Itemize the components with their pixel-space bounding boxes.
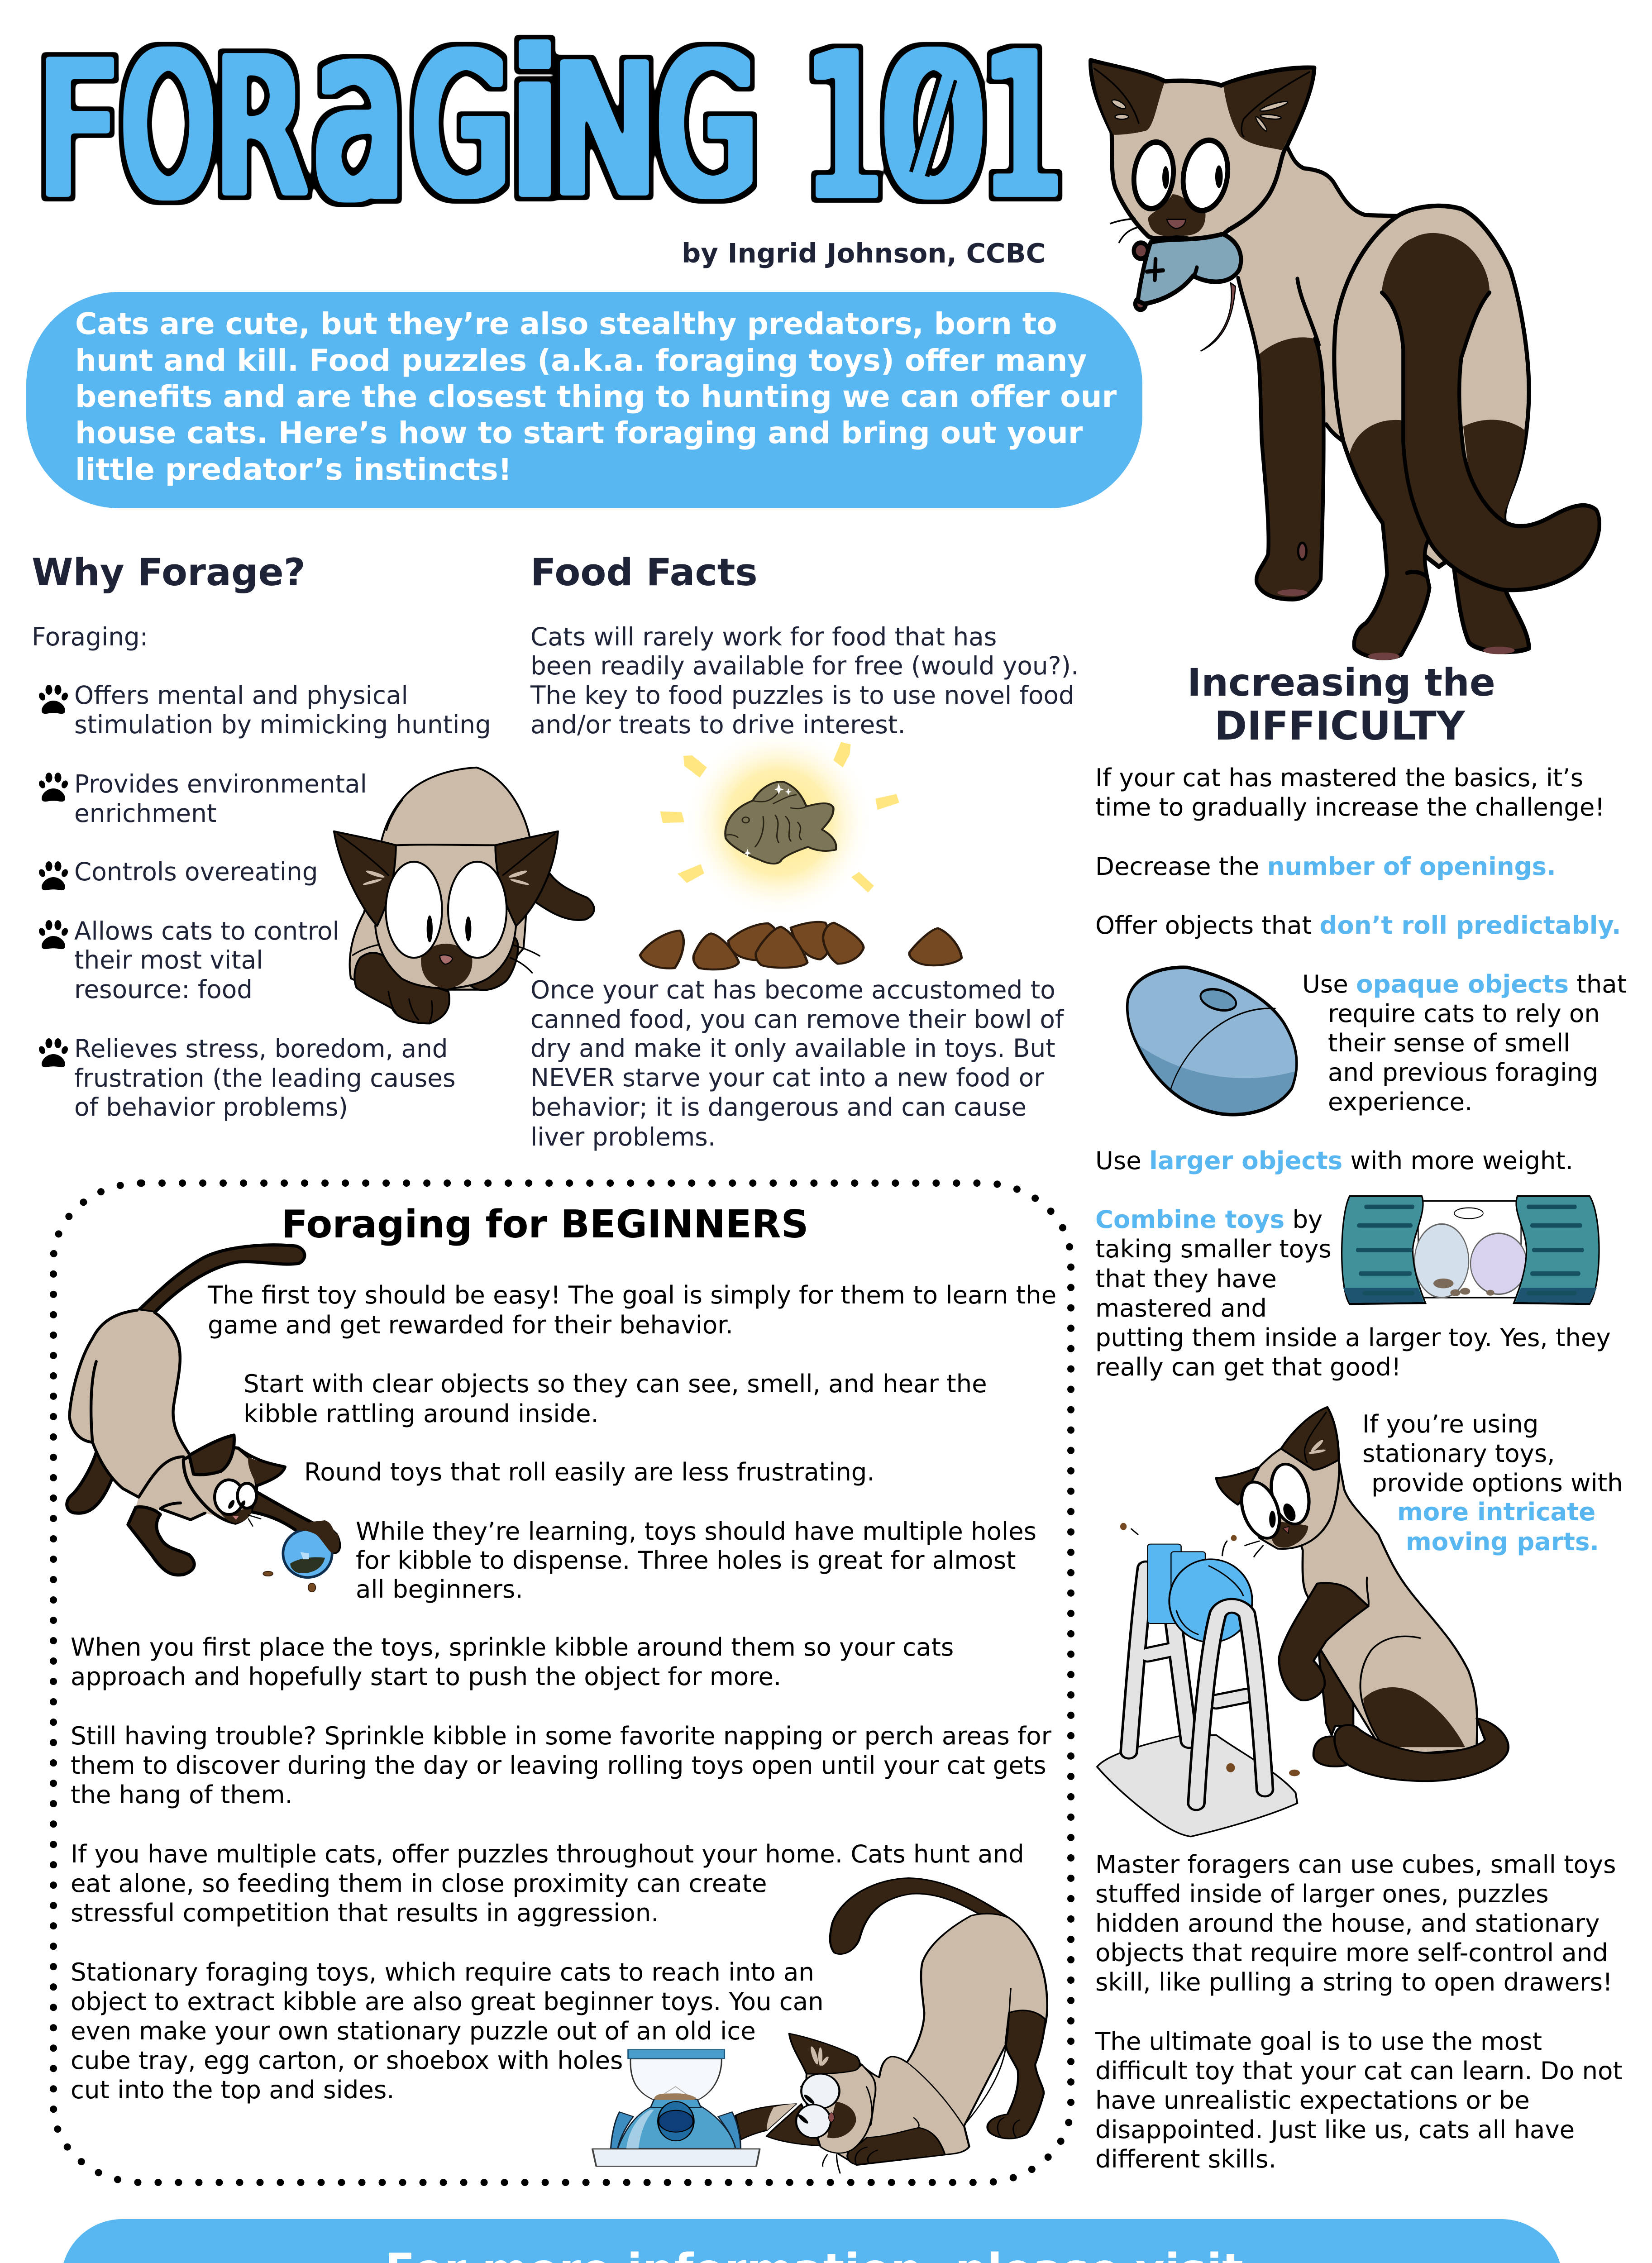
text: multiple holes: While they’re learning, toys should have multiple holes (356, 1517, 1036, 1546)
illustration: cat batting ball toy (67, 1245, 339, 1592)
title: 1 (807, 13, 883, 241)
text: larger objects: Use larger objects with more weight. (1095, 1146, 1573, 1175)
text: opaque objects: and previous foraging (1328, 1058, 1598, 1087)
icon: opaque blue toy (1127, 967, 1297, 1115)
text: food facts first paragraph: and/or treats to drive interest. (530, 710, 906, 739)
illustration: standing cat with toy mouse (1091, 60, 1599, 660)
list: foraging benefits (38, 681, 491, 1122)
text: multiple holes: all beginners. (356, 1575, 523, 1604)
text: stationary toys: cut into the top and sides. (71, 2075, 395, 2104)
text: combine toys: that they have (1095, 1264, 1277, 1293)
intro text: benefits and are the closest thing to hunting we can offer our (75, 379, 1117, 414)
text: sprinkle kibble: When you first place the toys, sprinkle kibble around them so your cats (71, 1633, 954, 1661)
text: opaque objects: their sense of smell (1328, 1028, 1570, 1057)
text: foraging intro: Foraging: (32, 622, 148, 651)
icon: paw (38, 685, 69, 714)
intro text: Cats are cute, but they’re also stealthy predators, born to (75, 306, 1057, 341)
text: opaque objects: experience. (1328, 1087, 1472, 1116)
text: combine toys: Combine toys by (1095, 1205, 1323, 1234)
text: multiple holes: for kibble to dispense. Three holes is great for almost (356, 1546, 1016, 1575)
icon: kibble pile (640, 922, 961, 969)
title: F (38, 24, 116, 237)
text: stationary toys: cube tray, egg carton, or shoebox with holes (71, 2046, 623, 2075)
icon: paw (38, 920, 69, 949)
text: opaque objects: require cats to rely on (1328, 999, 1600, 1028)
text: stationary toys: Stationary foraging toys, which require cats to reach into an (71, 1957, 814, 1986)
heading: increasing the difficulty: Increasing the (1187, 660, 1495, 705)
title (38, 0, 1064, 252)
byline: by Ingrid Johnson, CCBC (682, 238, 1046, 269)
text: food facts second paragraph: canned food, you can remove their bowl of (530, 1005, 1065, 1034)
title: O (123, 14, 214, 240)
text: food facts first paragraph: Cats will rarely work for food that has (530, 622, 997, 651)
bullet: stress: of behavior problems) (74, 1093, 348, 1122)
text: food facts second paragraph: dry and make it only available in toys. But (530, 1034, 1055, 1063)
text: combine toys: really can get that good! (1095, 1352, 1401, 1381)
panel: foraging for beginners (53, 1183, 1071, 2182)
text: stationary toys tip: stationary toys, (1362, 1439, 1555, 1468)
text: food facts first paragraph: The key to food puzzles is to use novel food (530, 681, 1074, 710)
text: opaque objects: Use opaque objects that (1302, 969, 1627, 998)
text: ultimate goal: different skills. (1095, 2144, 1276, 2173)
text: master foragers: skill, like pulling a string to open drawers! (1095, 1967, 1613, 1996)
text: ultimate goal: have unrealistic expectations or be (1095, 2086, 1530, 2115)
text: food facts second paragraph: liver problems. (530, 1122, 716, 1151)
intro text: hunt and kill. Food puzzles (a.k.a. foraging toys) offer many (75, 343, 1087, 378)
heading: Food Facts: Food Facts (530, 550, 758, 594)
title: G (658, 15, 757, 239)
icon: paw (38, 773, 69, 802)
title: 0 (879, 15, 988, 239)
title: N (552, 28, 657, 234)
bullet: enrichment: Provides environmental (74, 769, 367, 798)
bullet: stress: frustration (the leading causes (74, 1064, 456, 1093)
text: still having trouble: Still having trouble? Sprinkle kibble in some favorite napping or perch areas for (71, 1721, 1052, 1750)
text: combine toys: mastered and (1095, 1294, 1267, 1322)
text: sprinkle kibble: approach and hopefully start to push the object for more. (71, 1662, 781, 1691)
icon: glowing fish treat (660, 727, 899, 917)
text: master foragers: Master foragers can use cubes, small toys (1095, 1850, 1616, 1879)
illustration: crouching cat (334, 768, 594, 1023)
heading: beginners: Foraging for BEGINNERS (282, 1202, 808, 1246)
text: multiple cats: If you have multiple cats, offer puzzles throughout your home. Cats hunt and (71, 1839, 1024, 1868)
text: food facts first paragraph: been readily available for free (would you?). (530, 651, 1079, 680)
bullet: stress: Relieves stress, boredom, and (74, 1034, 448, 1063)
text: food facts second paragraph: NEVER starve your cat into a new food or (530, 1063, 1044, 1092)
text: stationary toys: even make your own stationary puzzle out of an old ice (71, 2016, 756, 2045)
text: multiple cats: eat alone, so feeding them in close proximity can create (71, 1869, 767, 1898)
title: R (215, 20, 306, 236)
heading: Why Forage: Why Forage? (32, 550, 306, 594)
text: right intro: If your cat has mastered the basics, it’s (1095, 763, 1583, 792)
bullet: control: Allows cats to control (74, 917, 339, 945)
intro panel (26, 292, 1142, 508)
text: clear objects: Start with clear objects so they can see, smell, and hear the (244, 1369, 987, 1398)
text: multiple cats: stressful competition that results in aggression. (71, 1898, 659, 1927)
icon: tube toy with balls inside (1342, 1196, 1599, 1304)
bullet: enrichment: enrichment (74, 799, 216, 828)
icon: paw (38, 1038, 69, 1067)
text: round toys: Round toys that roll easily are less frustrating. (304, 1457, 875, 1486)
bullet: mental stimulation: stimulation by mimicking hunting (74, 710, 491, 739)
footer banner (61, 2219, 1562, 2263)
title: i (503, 10, 566, 240)
text: ultimate goal: difficult toy that your cat can learn. Do not (1095, 2056, 1623, 2085)
text: stationary toys tip: moving parts. (1406, 1527, 1599, 1556)
text: still having trouble: them to discover during the day or leaving rolling toys open until your cat gets (71, 1751, 1046, 1780)
text: master foragers: stuffed inside of larger ones, puzzles (1095, 1879, 1549, 1908)
text: ultimate goal: disappointed. Just like us, cats all have (1095, 2115, 1575, 2144)
text: master foragers: hidden around the house, and stationary (1095, 1909, 1599, 1938)
text: food facts second paragraph: behavior; it is dangerous and can cause (530, 1093, 1027, 1122)
text: ultimate goal: The ultimate goal is to use the most (1095, 2027, 1542, 2056)
heading: increasing the difficulty (1187, 660, 1495, 749)
intro text: little predator’s instincts! (75, 452, 512, 487)
text: stationary toys tip: provide options with (1371, 1468, 1623, 1497)
icon: paw (38, 861, 69, 890)
text: food facts second paragraph: Once your cat has become accustomed to (530, 975, 1055, 1004)
illustration: cat with feeder toy (592, 1878, 1047, 2173)
text: stationary toys tip: more intricate (1397, 1497, 1595, 1526)
text: combine toys: taking smaller toys (1095, 1234, 1332, 1263)
bullet: mental stimulation: Offers mental and physical (74, 681, 408, 710)
bullet: control: resource: food (74, 975, 253, 1004)
text: still having trouble: the hang of them. (71, 1780, 293, 1809)
title: 1 (984, 13, 1064, 239)
title: G (413, 14, 510, 239)
text: right intro: time to gradually increase the challenge! (1095, 793, 1604, 821)
illustration: sitting cat with tower toy (1097, 1407, 1509, 1837)
heading: increasing the difficulty: DIFFICULTY (1214, 703, 1466, 749)
text: number of openings: Decrease the number of openings. (1095, 852, 1556, 881)
text: stationary toys: object to extract kibble are also great beginner toys. You can (71, 1987, 824, 2016)
bullet: control: their most vital (74, 945, 263, 974)
bullet: overeating: Controls overeating (74, 857, 318, 886)
text: first toy: game and get rewarded for their behavior. (208, 1310, 733, 1339)
text: master foragers: objects that require more self-control and (1095, 1938, 1608, 1967)
intro text: house cats. Here’s how to start foraging and bring out your (75, 415, 1083, 450)
text: roll predictably: Offer objects that don’t roll predictably. (1095, 911, 1621, 940)
text: stationary toys tip: If you’re using (1362, 1409, 1538, 1438)
text: clear objects: kibble rattling around inside. (244, 1399, 599, 1428)
text: first toy: The first toy should be easy! The goal is simply for them to learn the (207, 1280, 1056, 1309)
text: combine toys: putting them inside a larger toy. Yes, they (1095, 1323, 1611, 1352)
